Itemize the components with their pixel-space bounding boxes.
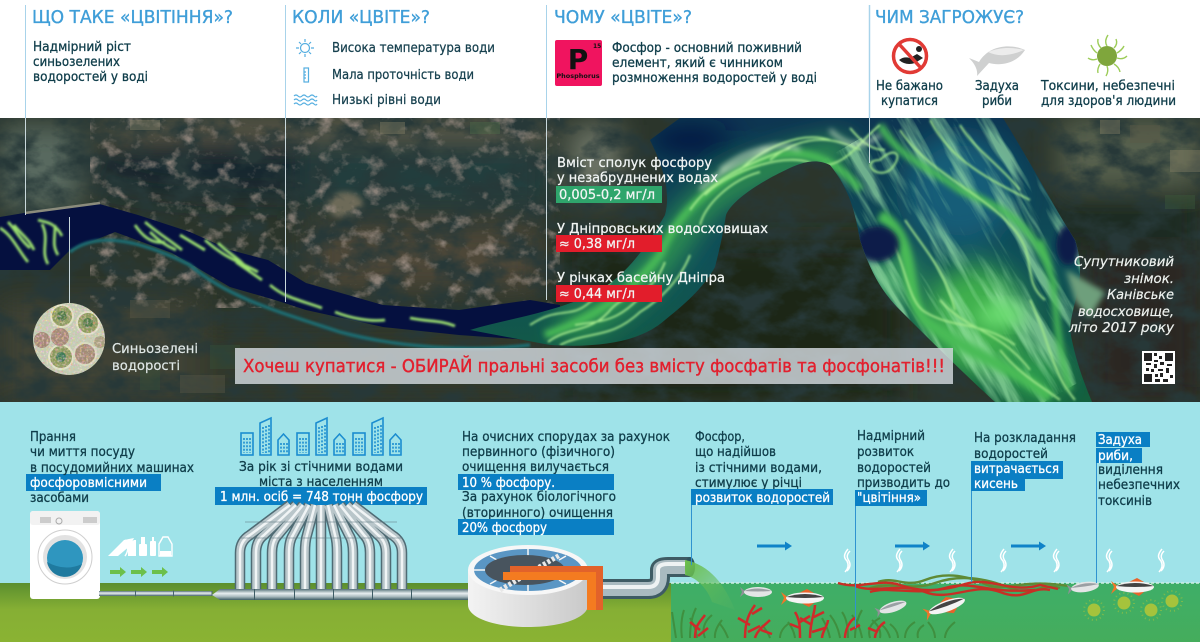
step: washing text: Прання [30,430,76,445]
step: treatment text: первинного (фізичного) [462,445,615,460]
orange channel [510,566,603,610]
step: excessive growth: "цвітіння» [857,491,921,506]
farm fields [60,120,1200,393]
description: Фосфор - основний поживний [612,41,802,56]
threat labels: риби [982,94,1012,109]
description: Надмірний ріст [33,40,131,55]
step: fish kill and toxins [1096,432,1180,509]
icons: detergents [108,537,172,556]
conditions list [332,41,495,108]
phosphorus content figures: ≈ 0,44 мг/л [559,287,635,302]
left river [0,203,560,348]
banner call to action: Хочеш купатися - ОБИРАЙ пральні засоби без вмісту фосфатів та фосфонатів!!! [243,355,945,377]
threat labels: Не бажано [876,79,943,94]
satellite caption: літо 2017 року [1068,321,1174,336]
steam [844,549,1164,572]
process diagram background [0,402,1200,642]
step: phosphorus in river [691,430,833,506]
red value box [556,235,662,252]
land base [0,118,1200,403]
icon: city skyline [241,418,401,455]
step: fish kill and toxins: риби, [1098,449,1133,464]
step: city text [215,460,427,505]
step: phosphorus in river: розвиток водоростей [695,491,830,506]
column divider lines [26,5,870,303]
polluted flow [685,560,735,610]
satellite caption: знімок. [1124,272,1174,287]
threat labels: Токсини, небезпечні [1040,79,1175,94]
small drain pipe [99,590,212,596]
step: excessive growth [855,429,950,506]
step: excessive growth: водоростей [857,461,931,476]
step: oxygen consumption [971,431,1076,492]
phosphorus content figures: ≈ 0,38 мг/л [559,237,635,252]
step: fish kill and toxins: виділення [1098,463,1163,478]
icon: ruler [304,68,308,82]
algae mat [838,575,1068,595]
icon: sun [296,39,314,57]
phosphorus content figures: 0,005-0,2 мг/л [559,188,655,203]
description: синьозелених [33,55,120,70]
heading: ЩО ТАКЕ «ЦВІТІННЯ»? [32,7,233,28]
icon: phosphorus element [555,40,602,86]
microscope circle: blue-green algae [33,303,106,375]
step: phosphorus in river: із стічними водами, [695,461,822,476]
treatment tank [468,545,603,627]
QR code [1142,351,1175,384]
algae label: Синьозелені [112,342,198,357]
section: threats [875,7,1176,109]
description [612,41,817,86]
reservoir [470,118,1108,402]
section: when it blooms [292,7,495,108]
step: treatment text: 20% фосфору [462,521,547,536]
step: city text: За рік зі стічними водами [239,460,403,475]
step: treatment text: (вторинного) очищення [462,506,613,521]
step: city text: 1 млн. осіб = 748 тонн фосфору [220,490,423,505]
step: treatment text: очищення вилучається [462,460,609,475]
stage pointer lines [692,463,1096,628]
phosphorus content figures: Вміст сполук фосфору [557,156,712,171]
step: fish kill and toxins: небезпечних [1098,478,1180,493]
algae label: водорості [112,359,180,374]
step: excessive growth: призводить до [857,476,950,491]
outlet pipe [600,557,695,589]
banner call to action [235,348,953,384]
threat labels: для здоров'я людини [1041,94,1176,109]
icon: phosphorus element: 15 [593,43,601,50]
icon: phosphorus element: Phosphorus [556,72,600,80]
threat labels: купатися [881,94,938,109]
icon: washing machine [30,511,100,599]
step: oxygen consumption: водоростей [974,447,1048,462]
satellite caption: Канівське [1107,288,1174,303]
step: washing text: чи миття посуду [30,445,135,460]
arrows: green flow [110,567,168,577]
step: phosphorus in river: що надійшов [695,445,776,460]
step: washing text: засобами [30,491,89,506]
description: елемент, який є чинником [612,56,783,71]
sewer pipe manifold [212,505,470,600]
description: водоростей у воді [33,70,148,85]
step: washing text: фосфоровмісними [30,476,147,491]
step: phosphorus in river: стимулює у річці [695,476,802,491]
heading: КОЛИ «ЦВІТЕ»? [292,7,430,28]
step: treatment text: На очисних спорудах за рахунок [462,430,670,445]
step: treatment text: 10 % фосфору. [462,476,555,491]
phosphorus content figures [556,156,768,302]
algae label [112,342,198,374]
toxin particles [1084,591,1182,620]
header background [0,0,1200,118]
icon: fish [969,46,1025,76]
step: oxygen consumption: На розкладання [974,431,1076,446]
step: phosphorus in river: Фосфор, [695,430,745,445]
satellite image [0,118,1200,402]
step: excessive growth: Надмірний [857,429,925,444]
section: what is bloom [32,7,233,85]
plants [672,605,955,638]
icon: phosphorus element: P [568,43,588,76]
conditions list: Низькі рівні води [332,93,441,108]
icon: waves [294,95,317,105]
step: washing text: в посудомийних машинах [30,461,194,476]
red value box [556,285,662,302]
river scene [672,605,955,638]
step: fish kill and toxins: токсинів [1098,494,1152,509]
step: excessive growth: розвиток [857,445,914,460]
description: розмноження водоростей у воді [612,71,817,86]
threat labels [876,79,1176,109]
heading: ЧОМУ «ЦВІТЕ»? [554,7,692,28]
phosphorus content figures: У річках басейну Дніпра [557,271,725,286]
satellite caption: водосховище, [1078,305,1174,320]
fish [740,578,1154,623]
step: oxygen consumption: витрачається [974,462,1059,477]
icon: toxin microbe [1088,35,1127,76]
description [33,40,148,85]
conditions list: Висока температура води [332,41,495,56]
icon: no swimming [894,40,926,72]
step: treatment text: За рахунок біологічного [462,490,616,505]
phosphorus content figures: У Дніпровських водосховищах [557,222,768,237]
green value box [556,186,662,203]
step: oxygen consumption: кисень [974,477,1018,492]
phosphorus content figures: у незабруднених водах [557,171,718,186]
step: treatment text [458,430,670,536]
step: washing text [26,430,194,506]
step: fish kill and toxins: Задуха [1098,433,1142,448]
conditions list: Мала проточність води [332,68,474,83]
flow arrows [757,542,1046,550]
satellite caption: Супутниковий [1074,255,1174,270]
step: city text: міста з населенням [259,475,383,490]
satellite caption [1068,255,1174,336]
heading: ЧИМ ЗАГРОЖУЄ? [875,7,1024,28]
threat labels: Задуха [975,79,1019,94]
section: why it blooms [554,7,817,86]
